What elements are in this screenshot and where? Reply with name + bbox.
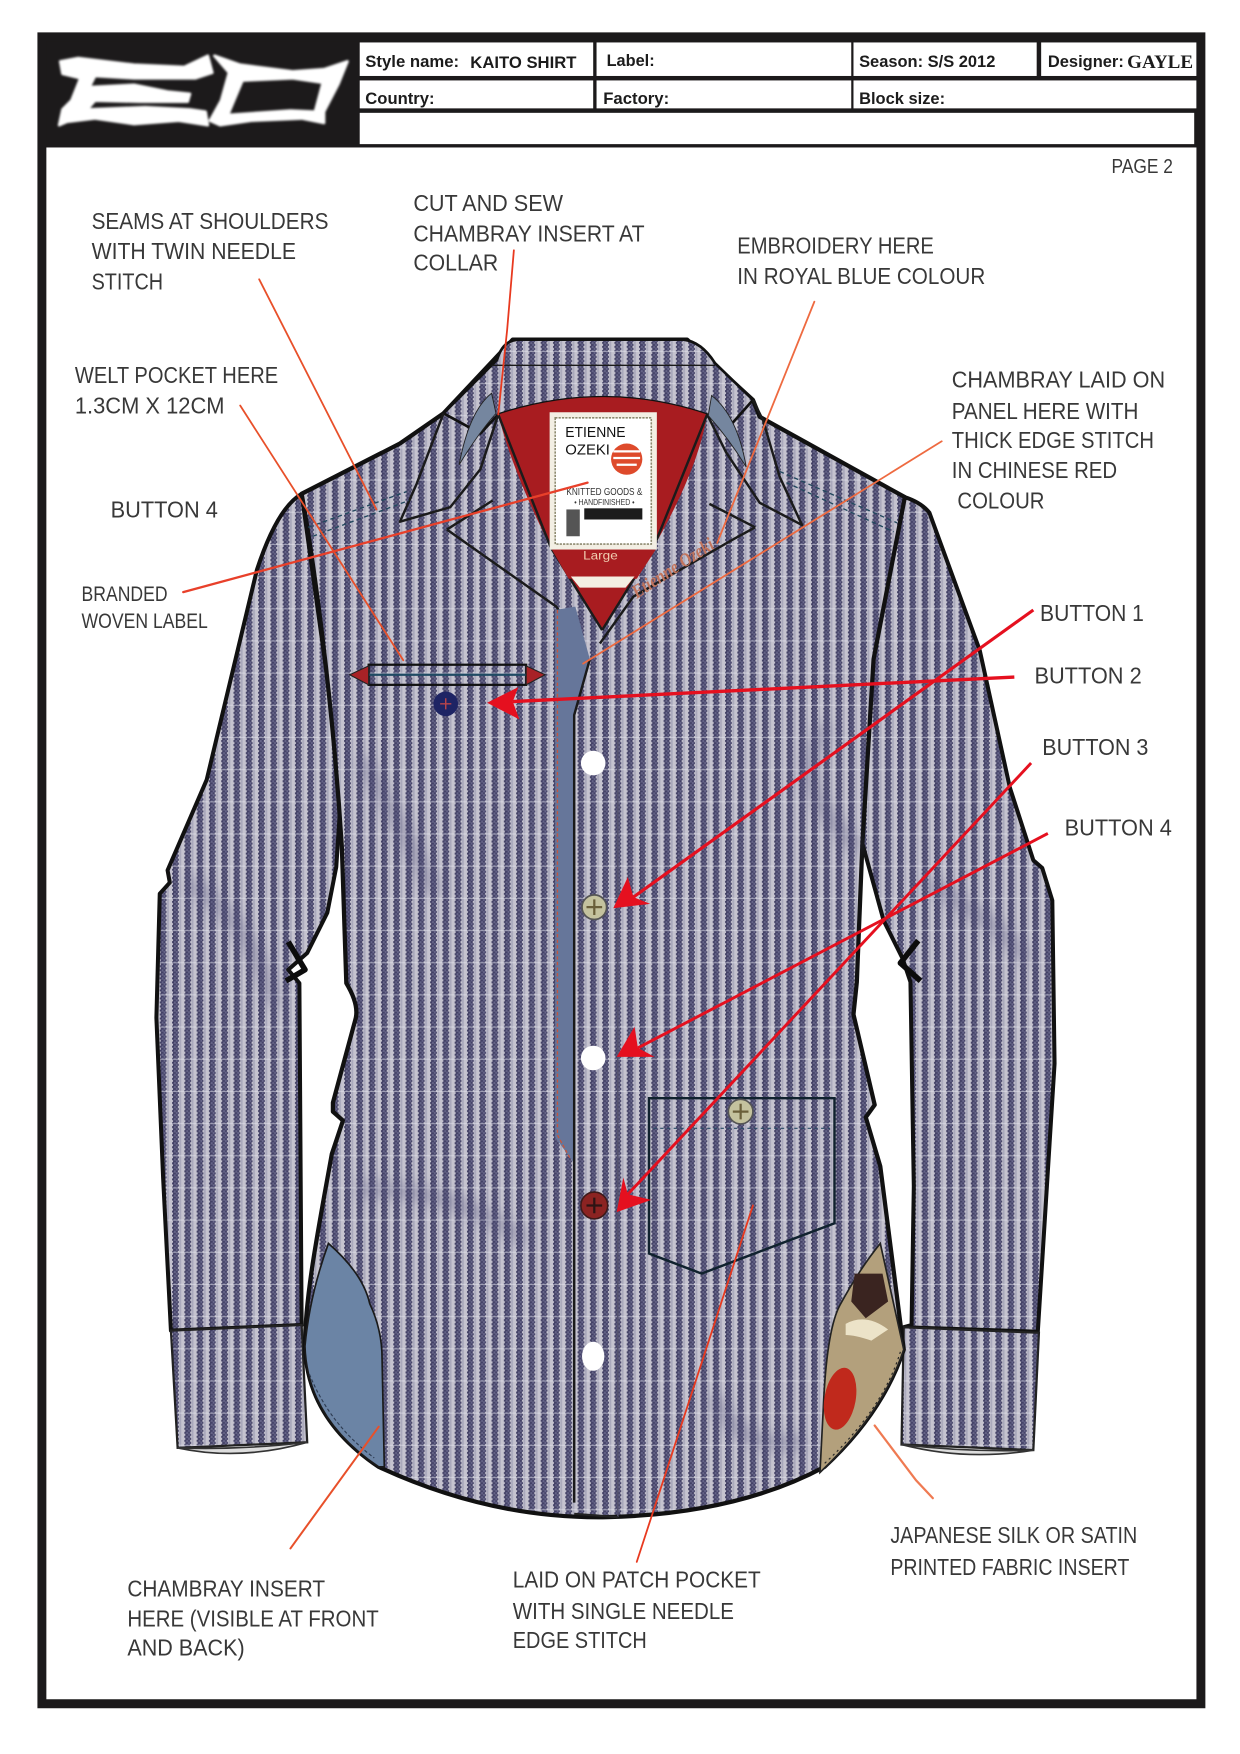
label: button 3: BUTTON 3 bbox=[1042, 734, 1148, 760]
label: chambray laid on panel: CHAMBRAY LAID ON bbox=[952, 367, 1165, 393]
button 2 arrow bbox=[487, 677, 1014, 719]
label: japanese silk insert: JAPANESE SILK OR SATIN bbox=[890, 1522, 1137, 1548]
twin needle shoulder stitching bbox=[308, 471, 897, 536]
label: patch pocket: WITH SINGLE NEEDLE bbox=[513, 1598, 734, 1624]
header fields: Factory: bbox=[603, 89, 669, 108]
woven neck label: Large bbox=[583, 549, 618, 563]
label: button 4 left: BUTTON 4 bbox=[111, 496, 218, 522]
left chambray side panel bbox=[305, 1243, 384, 1467]
label: button 4 right: BUTTON 4 bbox=[1065, 815, 1172, 841]
label: seams at shoulders: SEAMS AT SHOULDERS bbox=[92, 208, 328, 234]
back collar band bbox=[443, 340, 753, 433]
chest button bbox=[433, 692, 458, 716]
label: chambray side insert bbox=[127, 1575, 379, 1661]
label: chambray laid on panel: PANEL HERE WITH bbox=[952, 398, 1138, 424]
header fields: Block size: bbox=[859, 89, 945, 108]
woven neck label bbox=[550, 412, 657, 588]
label: chambray insert at collar: CHAMBRAY INSERT AT bbox=[413, 220, 645, 246]
page number: PAGE 2 bbox=[1112, 156, 1173, 178]
label: branded woven label bbox=[82, 583, 208, 633]
label: branded woven label: WOVEN LABEL bbox=[82, 610, 208, 633]
label: button 1: BUTTON 1 bbox=[1040, 600, 1144, 626]
header fields bbox=[365, 51, 1193, 108]
label: chambray side insert: CHAMBRAY INSERT bbox=[127, 1575, 325, 1601]
button 4 arrow bbox=[617, 833, 1048, 1057]
header fields: Season: S/S 2012 bbox=[859, 52, 995, 71]
button 1 arrow bbox=[613, 610, 1033, 908]
label: japanese silk insert: PRINTED FABRIC INSERT bbox=[890, 1554, 1129, 1580]
annotation leader lines bbox=[183, 250, 942, 1562]
label: button 2: BUTTON 2 bbox=[1034, 663, 1142, 689]
label: patch pocket: LAID ON PATCH POCKET bbox=[513, 1567, 761, 1593]
header fields: KAITO SHIRT bbox=[470, 53, 577, 72]
placket lines bbox=[574, 659, 618, 1517]
right sleeve bbox=[838, 497, 1055, 1455]
header fields: Country: bbox=[365, 89, 435, 108]
label: chambray laid on panel: THICK EDGE STITCH bbox=[952, 427, 1154, 453]
chambray placket strip bbox=[555, 607, 590, 1162]
button 3 arrow bbox=[617, 763, 1031, 1212]
patch pocket bbox=[649, 1098, 834, 1274]
woven neck label: KNITTED GOODS & bbox=[566, 487, 643, 498]
woven neck label: • HANDFINISHED • bbox=[574, 498, 635, 507]
header fields: GAYLE bbox=[1127, 52, 1193, 73]
label: chambray insert at collar: COLLAR bbox=[413, 249, 498, 275]
label: seams at shoulders bbox=[92, 208, 328, 294]
pocket button bbox=[728, 1099, 753, 1124]
label: japanese silk insert bbox=[890, 1522, 1137, 1580]
header block bbox=[41, 36, 1200, 147]
woven neck label: OZEKI bbox=[565, 443, 610, 459]
label: embroidery: EMBROIDERY HERE bbox=[737, 233, 934, 259]
label: seams at shoulders: STITCH bbox=[92, 268, 163, 294]
silk print side insert bbox=[819, 1243, 904, 1472]
red neck interior bbox=[498, 397, 707, 630]
label: embroidery bbox=[737, 233, 985, 289]
header fields: Label: bbox=[607, 51, 655, 70]
label: welt pocket: 1.3CM X 12CM bbox=[75, 392, 225, 418]
label: patch pocket: EDGE STITCH bbox=[513, 1627, 647, 1653]
label: chambray laid on panel: COLOUR bbox=[957, 487, 1045, 513]
label: chambray laid on panel: IN CHINESE RED bbox=[952, 457, 1117, 483]
collar and lapel lines bbox=[400, 365, 802, 644]
label: welt pocket: WELT POCKET HERE bbox=[75, 362, 278, 388]
label: chambray insert at collar: CUT AND SEW bbox=[413, 190, 564, 216]
label: chambray side insert: HERE (VISIBLE AT FRONT bbox=[127, 1606, 379, 1632]
front buttons bbox=[581, 751, 608, 1371]
label: chambray insert at collar bbox=[413, 190, 645, 275]
welt pocket bbox=[350, 665, 545, 685]
embroidery: Etienne Ozeki bbox=[627, 534, 719, 603]
label: branded woven label: BRANDED bbox=[82, 583, 168, 606]
collar chambray inserts bbox=[459, 393, 746, 467]
left sleeve bbox=[156, 494, 342, 1453]
label: embroidery: IN ROYAL BLUE COLOUR bbox=[737, 263, 985, 289]
label: patch pocket bbox=[513, 1567, 761, 1653]
woven neck label: ETIENNE bbox=[565, 425, 626, 441]
shirt body bbox=[302, 340, 905, 1517]
label: welt pocket bbox=[75, 362, 278, 418]
label: chambray side insert: AND BACK) bbox=[127, 1635, 245, 1661]
label: seams at shoulders: WITH TWIN NEEDLE bbox=[92, 238, 296, 264]
header fields: Designer: bbox=[1048, 52, 1124, 71]
label: chambray laid on panel bbox=[952, 367, 1165, 513]
logo mark bbox=[59, 56, 347, 125]
fabric fold shading bbox=[190, 726, 1028, 1443]
shirt illustration bbox=[156, 340, 1055, 1517]
header fields: Style name: bbox=[365, 52, 459, 71]
